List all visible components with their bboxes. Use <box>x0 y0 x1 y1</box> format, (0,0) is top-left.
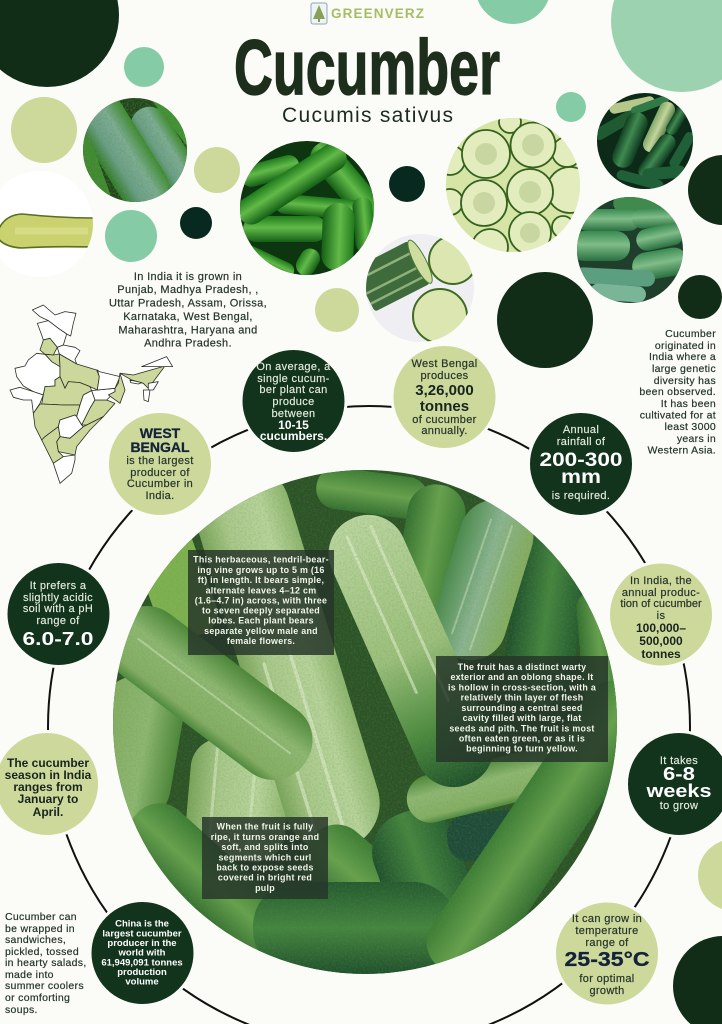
caption box: fruit description: seeds and pith. The fruit is most <box>449 724 595 734</box>
info circle: largest producer: India. <box>145 490 175 502</box>
info circle: rainfall: rainfall of <box>557 436 606 448</box>
caption box: fruit description: often eaten green, or as it is <box>459 734 585 744</box>
text: origin of cucumber: been observed. <box>639 386 716 398</box>
caption box: ripe fruit: When the fruit is fully <box>217 822 313 832</box>
text: origin of cucumber: cultivated for at <box>640 410 716 422</box>
text: origin of cucumber: originated in <box>655 340 716 352</box>
info circle: season <box>0 732 100 836</box>
info circle: growth time <box>626 732 722 836</box>
text: where grown in India: Maharashtra, Haryana and <box>118 324 258 336</box>
top dark cucumber <box>316 470 425 519</box>
logo: Greenverz: GREENVERZ <box>331 6 424 21</box>
photo: dark green cucumbers <box>597 93 693 189</box>
text: where grown in India: Karnataka, West Bengal, <box>123 311 253 323</box>
bottom middle speckled cucumber <box>372 810 468 900</box>
text: origin of cucumber: diversity has <box>654 375 716 387</box>
caption box: ripe fruit <box>202 817 328 899</box>
info circle: rainfall: 200-300 <box>540 450 622 471</box>
caption box: ripe fruit: pulp <box>255 883 275 893</box>
info circle: largest producer: BENGAL <box>130 439 190 455</box>
text: where grown in India: Punjab, Madhya Pradesh, , <box>117 284 259 296</box>
info circle: yield per plant <box>241 348 346 454</box>
text: culinary uses: in hearty salads, <box>5 957 87 969</box>
text: culinary uses: sandwiches, <box>5 934 66 946</box>
speckle texture <box>113 470 618 975</box>
bottom-right long cucumber <box>427 681 617 964</box>
info circle: growth time: It takes <box>660 755 698 767</box>
text: where grown in India <box>109 271 267 350</box>
info circle: West Bengal production: West Bengal <box>411 358 478 370</box>
info circle: annual production in India: tion of cucumber <box>620 598 702 610</box>
caption box: ripe fruit: segments which curl <box>218 852 312 862</box>
info circle: season: January to <box>18 792 78 806</box>
info circle: annual production in India: 500,000 <box>639 634 683 648</box>
caption box: fruit description: exterior and an oblong shape. It <box>450 672 594 682</box>
info circle: annual production in India: 100,000– <box>636 621 686 635</box>
info circle: China <box>90 900 195 1006</box>
photo: stacked cucumbers <box>577 197 683 303</box>
info circle: season: season in India <box>5 768 92 782</box>
info circle: temperature: It can grow in <box>572 913 642 925</box>
caption box: ripe fruit: soft, and splits into <box>221 842 309 852</box>
horizontal pale cucumber <box>406 746 553 823</box>
info circle: temperature: temperature <box>575 925 639 937</box>
info circle: China: producer in the <box>107 938 177 949</box>
info circle: rainfall: is required. <box>552 490 610 502</box>
info circle: yield per plant: 10-15 <box>278 418 309 432</box>
bottom big dark cucumber <box>253 882 457 974</box>
central pale cucumber <box>198 484 380 844</box>
info circle: China: 61,949,091 tonnes <box>101 958 183 968</box>
text: origin of cucumber: Cucumber <box>665 328 716 340</box>
caption box: plant description: ing vine grows up to 5 m (16 <box>197 565 325 575</box>
caption box: plant description: to seven deeply separated <box>202 606 320 616</box>
info circle: growth time: weeks <box>645 780 712 801</box>
caption box: plant description: alternate leaves 4–12 cm <box>206 586 316 596</box>
caption box: ripe fruit: covered in bright red <box>218 872 312 882</box>
info circle: yield per plant: cucumbers. <box>260 429 327 443</box>
text: culinary uses: soups. <box>5 1004 38 1016</box>
caption box: plant description: (1.6–4.7 in) across, with three <box>195 596 327 606</box>
info circle: West Bengal production: tonnes <box>420 398 469 415</box>
info circle: yield per plant: between <box>271 408 316 420</box>
front pale cucumber <box>328 514 491 788</box>
info circle: West Bengal production: of cucumber <box>412 414 477 426</box>
info circle: soil pH: range of <box>36 615 80 627</box>
bottom-left long cucumber <box>132 803 318 970</box>
caption box: plant description: female flowers. <box>227 636 295 646</box>
photo: cucumber slices <box>446 118 580 252</box>
info circle: rainfall: mm <box>561 467 601 488</box>
text: culinary uses: or comforting <box>5 992 70 1004</box>
text: origin of cucumber: least 3000 <box>665 421 716 433</box>
lower left striped cucumber <box>186 741 286 862</box>
info circle: growth time: to grow <box>660 800 698 812</box>
info circle: temperature: for optimal <box>579 973 635 985</box>
info circle: annual production in India <box>608 562 714 667</box>
info circle: temperature: 25-35°C <box>564 949 650 971</box>
lower centre green cucumber <box>302 824 380 882</box>
info circle: largest producer: is the largest <box>126 455 194 467</box>
caption box: ripe fruit: ripe, it turns orange and <box>211 832 319 842</box>
caption box: fruit description: The fruit has a distinct warty <box>458 662 586 672</box>
caption box: plant description: lobes. Each plant bears <box>208 616 314 626</box>
text: culinary uses: be wrapped in <box>5 923 75 935</box>
text: origin of cucumber: large genetic <box>652 363 716 375</box>
caption box: fruit description: is hollow in cross-section, with a <box>448 682 596 692</box>
pale teal cucumber <box>436 501 534 660</box>
info circle: season: ranges from <box>13 780 83 794</box>
crossing left cucumber <box>118 606 312 780</box>
info circle: largest producer: Cucumber in <box>127 478 193 490</box>
caption box: fruit description: relatively thin layer of flesh <box>461 692 583 702</box>
info circle: soil pH: 6.0-7.0 <box>22 629 94 649</box>
text: origin of cucumber: Western Asia. <box>648 444 716 456</box>
info circle: largest producer: WEST <box>140 425 181 441</box>
left lower cucumber <box>113 678 183 824</box>
photo: warty cucumbers <box>83 98 187 202</box>
connecting ring <box>48 406 690 1024</box>
text: culinary uses: made into <box>5 969 54 981</box>
info circle: yield per plant: produce <box>272 396 315 408</box>
main cucumber photo <box>113 470 617 974</box>
caption box: fruit description <box>436 656 608 762</box>
logo: Greenverz <box>311 3 424 24</box>
info circle: China: China is the <box>115 918 169 930</box>
info circle: annual production in India: tonnes <box>641 647 681 661</box>
caption box: fruit description: cavity filled with large, flat <box>463 713 581 723</box>
info circle: China: largest cucumber <box>102 928 182 940</box>
caption box: plant description: ft) in length. It bears simple, <box>198 575 324 585</box>
photo: bright green cucumbers <box>240 141 374 275</box>
upper left leaf-green cucumber <box>148 539 218 635</box>
info circle: largest producer <box>108 412 212 516</box>
info circle: largest producer: producer of <box>130 467 190 479</box>
text: culinary uses: summer coolers <box>5 980 84 992</box>
far right cucumber <box>576 595 616 705</box>
text: origin of cucumber: It has been <box>661 398 716 410</box>
info circle: soil pH: It prefers a <box>30 580 87 592</box>
title: Cucumber <box>234 23 500 111</box>
caption box: fruit description: surrounding a central seed <box>461 703 583 713</box>
upper right dark cucumber <box>506 534 584 656</box>
info circle: annual production in India: In India, the <box>630 575 692 587</box>
info circle: soil pH: slightly acidic <box>23 592 93 604</box>
info circle: rainfall: Annual <box>563 424 599 436</box>
text: origin of cucumber: India where a <box>649 351 716 363</box>
info circle: temperature: growth <box>589 985 625 997</box>
info circle: rainfall <box>528 412 634 516</box>
info circle: annual production in India: is <box>657 610 665 622</box>
subtitle: Cucumis sativus <box>282 104 453 127</box>
info circle: West Bengal production: produces <box>420 370 469 382</box>
caption box: ripe fruit: back to expose seeds <box>216 862 314 872</box>
text: culinary uses: pickled, tossed <box>5 946 79 958</box>
text: where grown in India: Uttar Pradesh, Assam, Orissa, <box>109 298 267 310</box>
text: where grown in India: Andhra Pradesh. <box>144 338 232 350</box>
info circle: China: volume <box>125 976 159 988</box>
info circle: season: The cucumber <box>7 756 89 770</box>
info circle: soil pH: soil with a pH <box>23 603 93 615</box>
info circle: yield per plant: single cucum- <box>257 373 330 385</box>
info circle: West Bengal production <box>392 344 497 450</box>
photo: halved cucumber on white <box>0 213 93 249</box>
info circle: yield per plant: On average, a <box>256 361 331 373</box>
info circle: temperature: range of <box>585 937 629 949</box>
info circle: West Bengal production: annually. <box>421 425 468 437</box>
photo: cut cucumber <box>366 234 474 342</box>
caption box: plant description: This herbaceous, tendril-bear- <box>193 554 329 564</box>
caption box: plant description <box>188 550 334 655</box>
info circle: growth time: 6-8 <box>663 763 695 784</box>
text: culinary uses <box>5 911 87 1016</box>
text: origin of cucumber: years in <box>677 433 716 445</box>
map of India <box>10 305 173 483</box>
info circle: annual production in India: annual produc- <box>622 587 700 599</box>
caption box: plant description: separate yellow male and <box>204 626 318 636</box>
bottom dark small cucumber <box>447 810 510 862</box>
info circle: season: April. <box>33 805 63 819</box>
text: where grown in India: In India it is grown in <box>134 271 242 283</box>
info circle: soil pH <box>6 562 111 666</box>
text: origin of cucumber <box>639 328 716 456</box>
upper middle cucumber <box>403 484 466 610</box>
info circle: West Bengal production: 3,26,000 <box>415 382 474 399</box>
text: culinary uses: Cucumber can <box>5 911 77 923</box>
info circle: yield per plant: ber plant can <box>259 384 328 396</box>
info circle: temperature <box>554 901 660 1006</box>
info circle: China: world with <box>118 948 166 958</box>
caption box: fruit description: beginning to turn yellow. <box>466 744 578 754</box>
info circle: China: production <box>117 967 167 978</box>
